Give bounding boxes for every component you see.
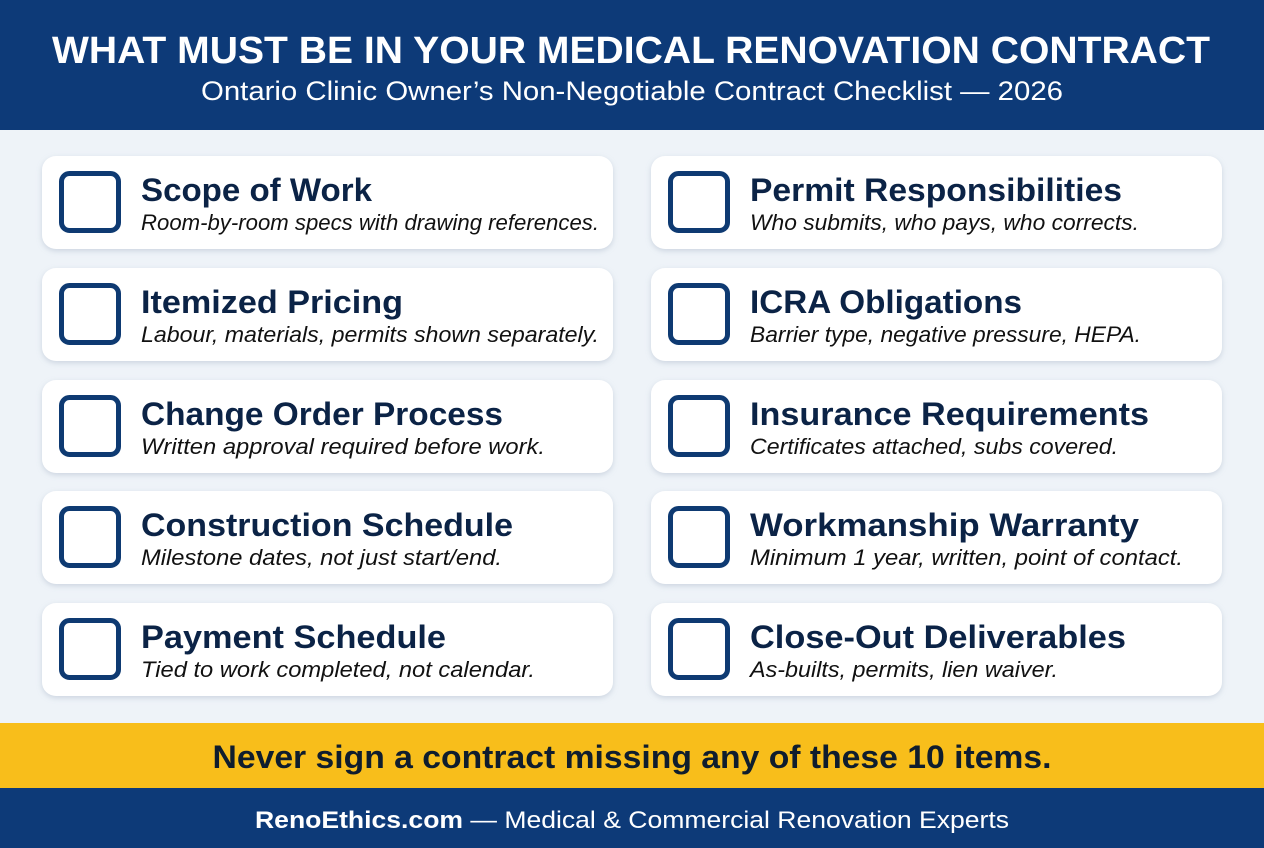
card: Change Order Process: Written approval required before work. <box>141 434 545 459</box>
warning banner: Never sign a contract missing any of these 10 items. <box>212 739 1052 775</box>
card: Workmanship Warranty <box>651 491 1222 584</box>
card: Construction Schedule: Milestone dates, not just start/end. <box>141 545 502 570</box>
card: Permit Responsibilities: Who submits, who pays, who corrects. <box>750 210 1139 235</box>
card: Close-Out Deliverables <box>651 603 1222 696</box>
card: Construction Schedule <box>42 491 613 584</box>
card: ICRA Obligations: Barrier type, negative pressure, HEPA. <box>750 322 1141 347</box>
card: Close-Out Deliverables: Close-Out Deliverables <box>750 619 1126 655</box>
icon: checkbox <box>62 508 118 566</box>
card: Scope of Work: Room-by-room specs with drawing references. <box>141 210 599 235</box>
card: Construction Schedule: Construction Schedule <box>141 507 513 543</box>
card: Scope of Work <box>42 156 613 249</box>
icon: checkbox <box>62 174 118 230</box>
title: WHAT MUST BE IN YOUR MEDICAL RENOVATION CONTRACT <box>52 30 1210 72</box>
icon: checkbox <box>670 174 728 230</box>
card: Insurance Requirements: Insurance Requirements <box>750 396 1149 432</box>
card: Change Order Process: Change Order Process <box>141 396 503 432</box>
card: Payment Schedule: Payment Schedule <box>141 619 446 655</box>
card: Permit Responsibilities: Permit Responsibilities <box>750 172 1122 208</box>
warning banner <box>0 723 1264 788</box>
icon: checkbox <box>670 508 728 566</box>
icon: checkbox <box>62 398 118 454</box>
header <box>0 0 1264 130</box>
card: Change Order Process <box>42 380 613 473</box>
icon: checkbox <box>670 286 728 342</box>
card: Scope of Work: Scope of Work <box>141 172 372 208</box>
card: Insurance Requirements: Certificates attached, subs covered. <box>750 434 1118 459</box>
card: Permit Responsibilities <box>651 156 1222 249</box>
card: Insurance Requirements <box>651 380 1222 473</box>
footer <box>0 788 1264 848</box>
card: Close-Out Deliverables: As-builts, permits, lien waiver. <box>748 657 1058 682</box>
card: Itemized Pricing: Itemized Pricing <box>141 284 403 320</box>
card: Itemized Pricing: Labour, materials, permits shown separately. <box>141 322 599 347</box>
card: Itemized Pricing <box>42 268 613 361</box>
card: ICRA Obligations: ICRA Obligations <box>750 284 1022 320</box>
card: Workmanship Warranty: Minimum 1 year, written, point of contact. <box>750 545 1183 570</box>
icon: checkbox <box>62 620 118 678</box>
card: ICRA Obligations <box>651 268 1222 361</box>
footer: RenoEthics.com — Medical & Commercial Renovation Experts <box>255 807 1009 834</box>
icon: checkbox <box>670 620 728 678</box>
icon: checkbox <box>62 286 118 342</box>
icon: checkbox <box>670 398 728 454</box>
card: Payment Schedule: Tied to work completed, not calendar. <box>141 657 535 682</box>
card: Payment Schedule <box>42 603 613 696</box>
card: Workmanship Warranty: Workmanship Warranty <box>750 507 1139 543</box>
subtitle: Ontario Clinic Owner’s Non-Negotiable Contract Checklist — 2026 <box>201 76 1063 106</box>
